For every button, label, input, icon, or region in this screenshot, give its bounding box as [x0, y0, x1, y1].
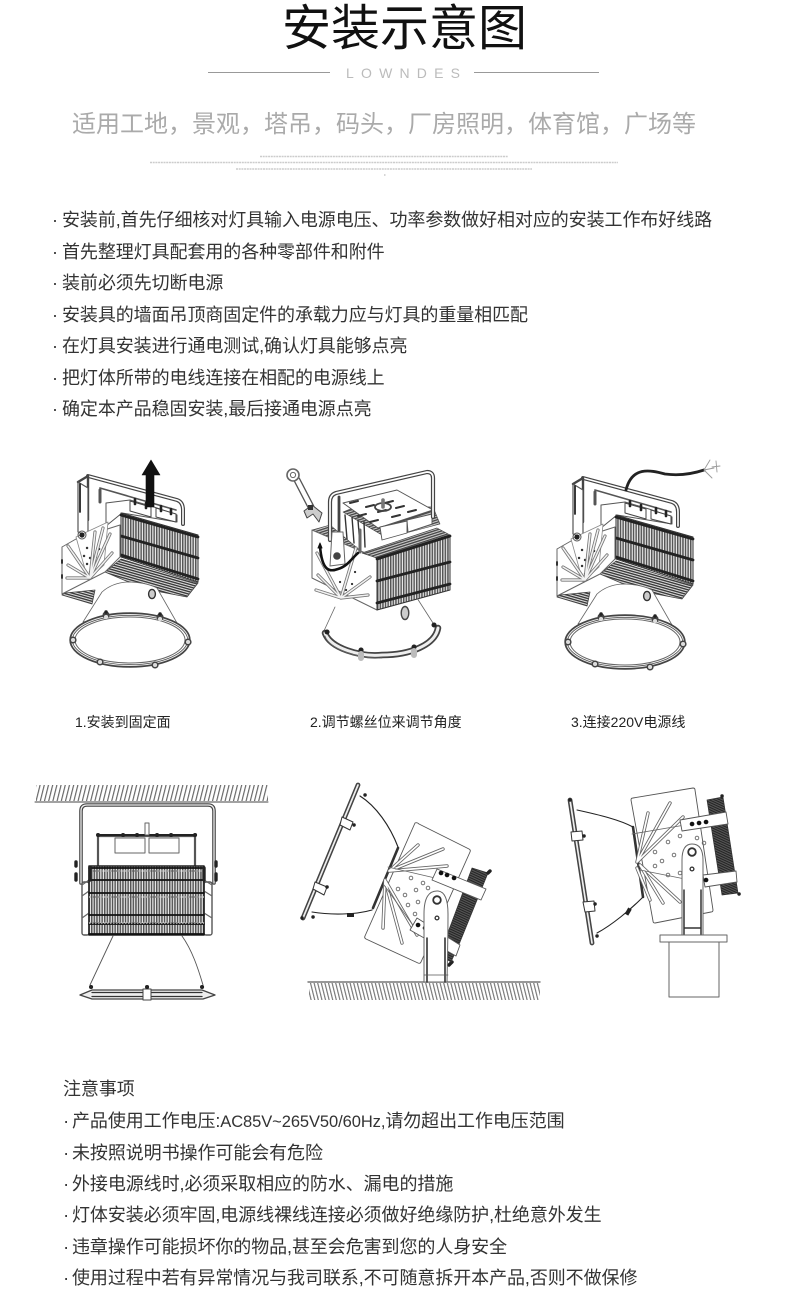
step captions: 3.连接220V电源线 [571, 714, 685, 730]
subtitle: applications: 适用工地，景观，塔吊，码头，厂房照明，体育馆，广场等 [72, 111, 696, 138]
installation instructions list: 首先整理灯具配套用的各种零部件和附件 [62, 242, 385, 262]
safety notes: 产品使用工作电压:AC85V~265V50/60Hz,请勿超出工作电压范围 [72, 1111, 565, 1131]
installation instructions list: 在灯具安装进行通电测试,确认灯具能够点亮 [62, 336, 407, 356]
safety notes: 注意事项 [63, 1079, 135, 1099]
illustration: step 1 lamp with arrow [62, 460, 198, 666]
safety notes: 违章操作可能损坏你的物品,甚至会危害到您的人身安全 [72, 1237, 507, 1257]
safety notes [63, 1079, 637, 1288]
icon: upward arrow [142, 460, 160, 507]
diagram: ground mount tilted [302, 785, 540, 1000]
safety notes: · [63, 1237, 69, 1257]
step captions: 2.调节螺丝位来调节角度 [310, 714, 462, 730]
installation instructions list: 安装前,首先仔细核对灯具输入电源电压、功率参数做好相对应的安装工作布好线路 [62, 210, 712, 230]
safety notes: 使用过程中若有异常情况与我司联系,不可随意拆开本产品,否则不做保修 [72, 1268, 637, 1288]
safety notes: · [63, 1143, 69, 1163]
power cable [626, 470, 704, 490]
diagram: pedestal mount tilted [570, 788, 739, 997]
safety notes: · [63, 1205, 69, 1225]
installation instructions list: · [52, 273, 58, 293]
safety notes: 未按照说明书操作可能会有危险 [72, 1143, 323, 1163]
brand divider: LOWNDES: LOWNDES [346, 65, 467, 81]
safety notes: · [63, 1174, 69, 1194]
icon: wrench [287, 469, 322, 522]
installation instructions list: · [52, 242, 58, 262]
safety notes: 灯体安装必须牢固,电源线裸线连接必须做好绝缘防护,杜绝意外发生 [72, 1205, 602, 1225]
fine print decoration [150, 156, 618, 175]
safety notes: · [63, 1268, 69, 1288]
installation instructions list: 装前必须先切断电源 [62, 273, 223, 293]
installation instructions list: · [52, 399, 58, 419]
safety notes: 外接电源线时,必须采取相应的防水、漏电的措施 [72, 1174, 453, 1194]
step captions: 1.安装到固定面 [75, 714, 171, 730]
installation instructions list: · [52, 210, 58, 230]
safety notes: · [63, 1111, 69, 1131]
illustration: step 3 lamp with power cable [557, 460, 720, 668]
installation instructions list: 安装具的墙面吊顶商固定件的承载力应与灯具的重量相匹配 [62, 305, 528, 325]
ground hatch [309, 983, 540, 1000]
ceiling hatch [36, 785, 268, 801]
installation instructions list: 把灯体所带的电线连接在相配的电源线上 [62, 368, 385, 388]
installation instructions list: 确定本产品稳固安装,最后接通电源点亮 [62, 399, 372, 419]
title: 安装示意图 [282, 2, 527, 56]
installation instructions list [52, 210, 712, 419]
illustration: step 2 lamp with wrench [287, 469, 450, 658]
pedestal base [660, 935, 727, 997]
installation instructions list: · [52, 368, 58, 388]
diagram: ceiling mount [35, 785, 268, 1000]
stripped wire ends [704, 460, 720, 478]
installation instructions list: · [52, 305, 58, 325]
step captions [75, 714, 685, 730]
installation instructions list: · [52, 336, 58, 356]
